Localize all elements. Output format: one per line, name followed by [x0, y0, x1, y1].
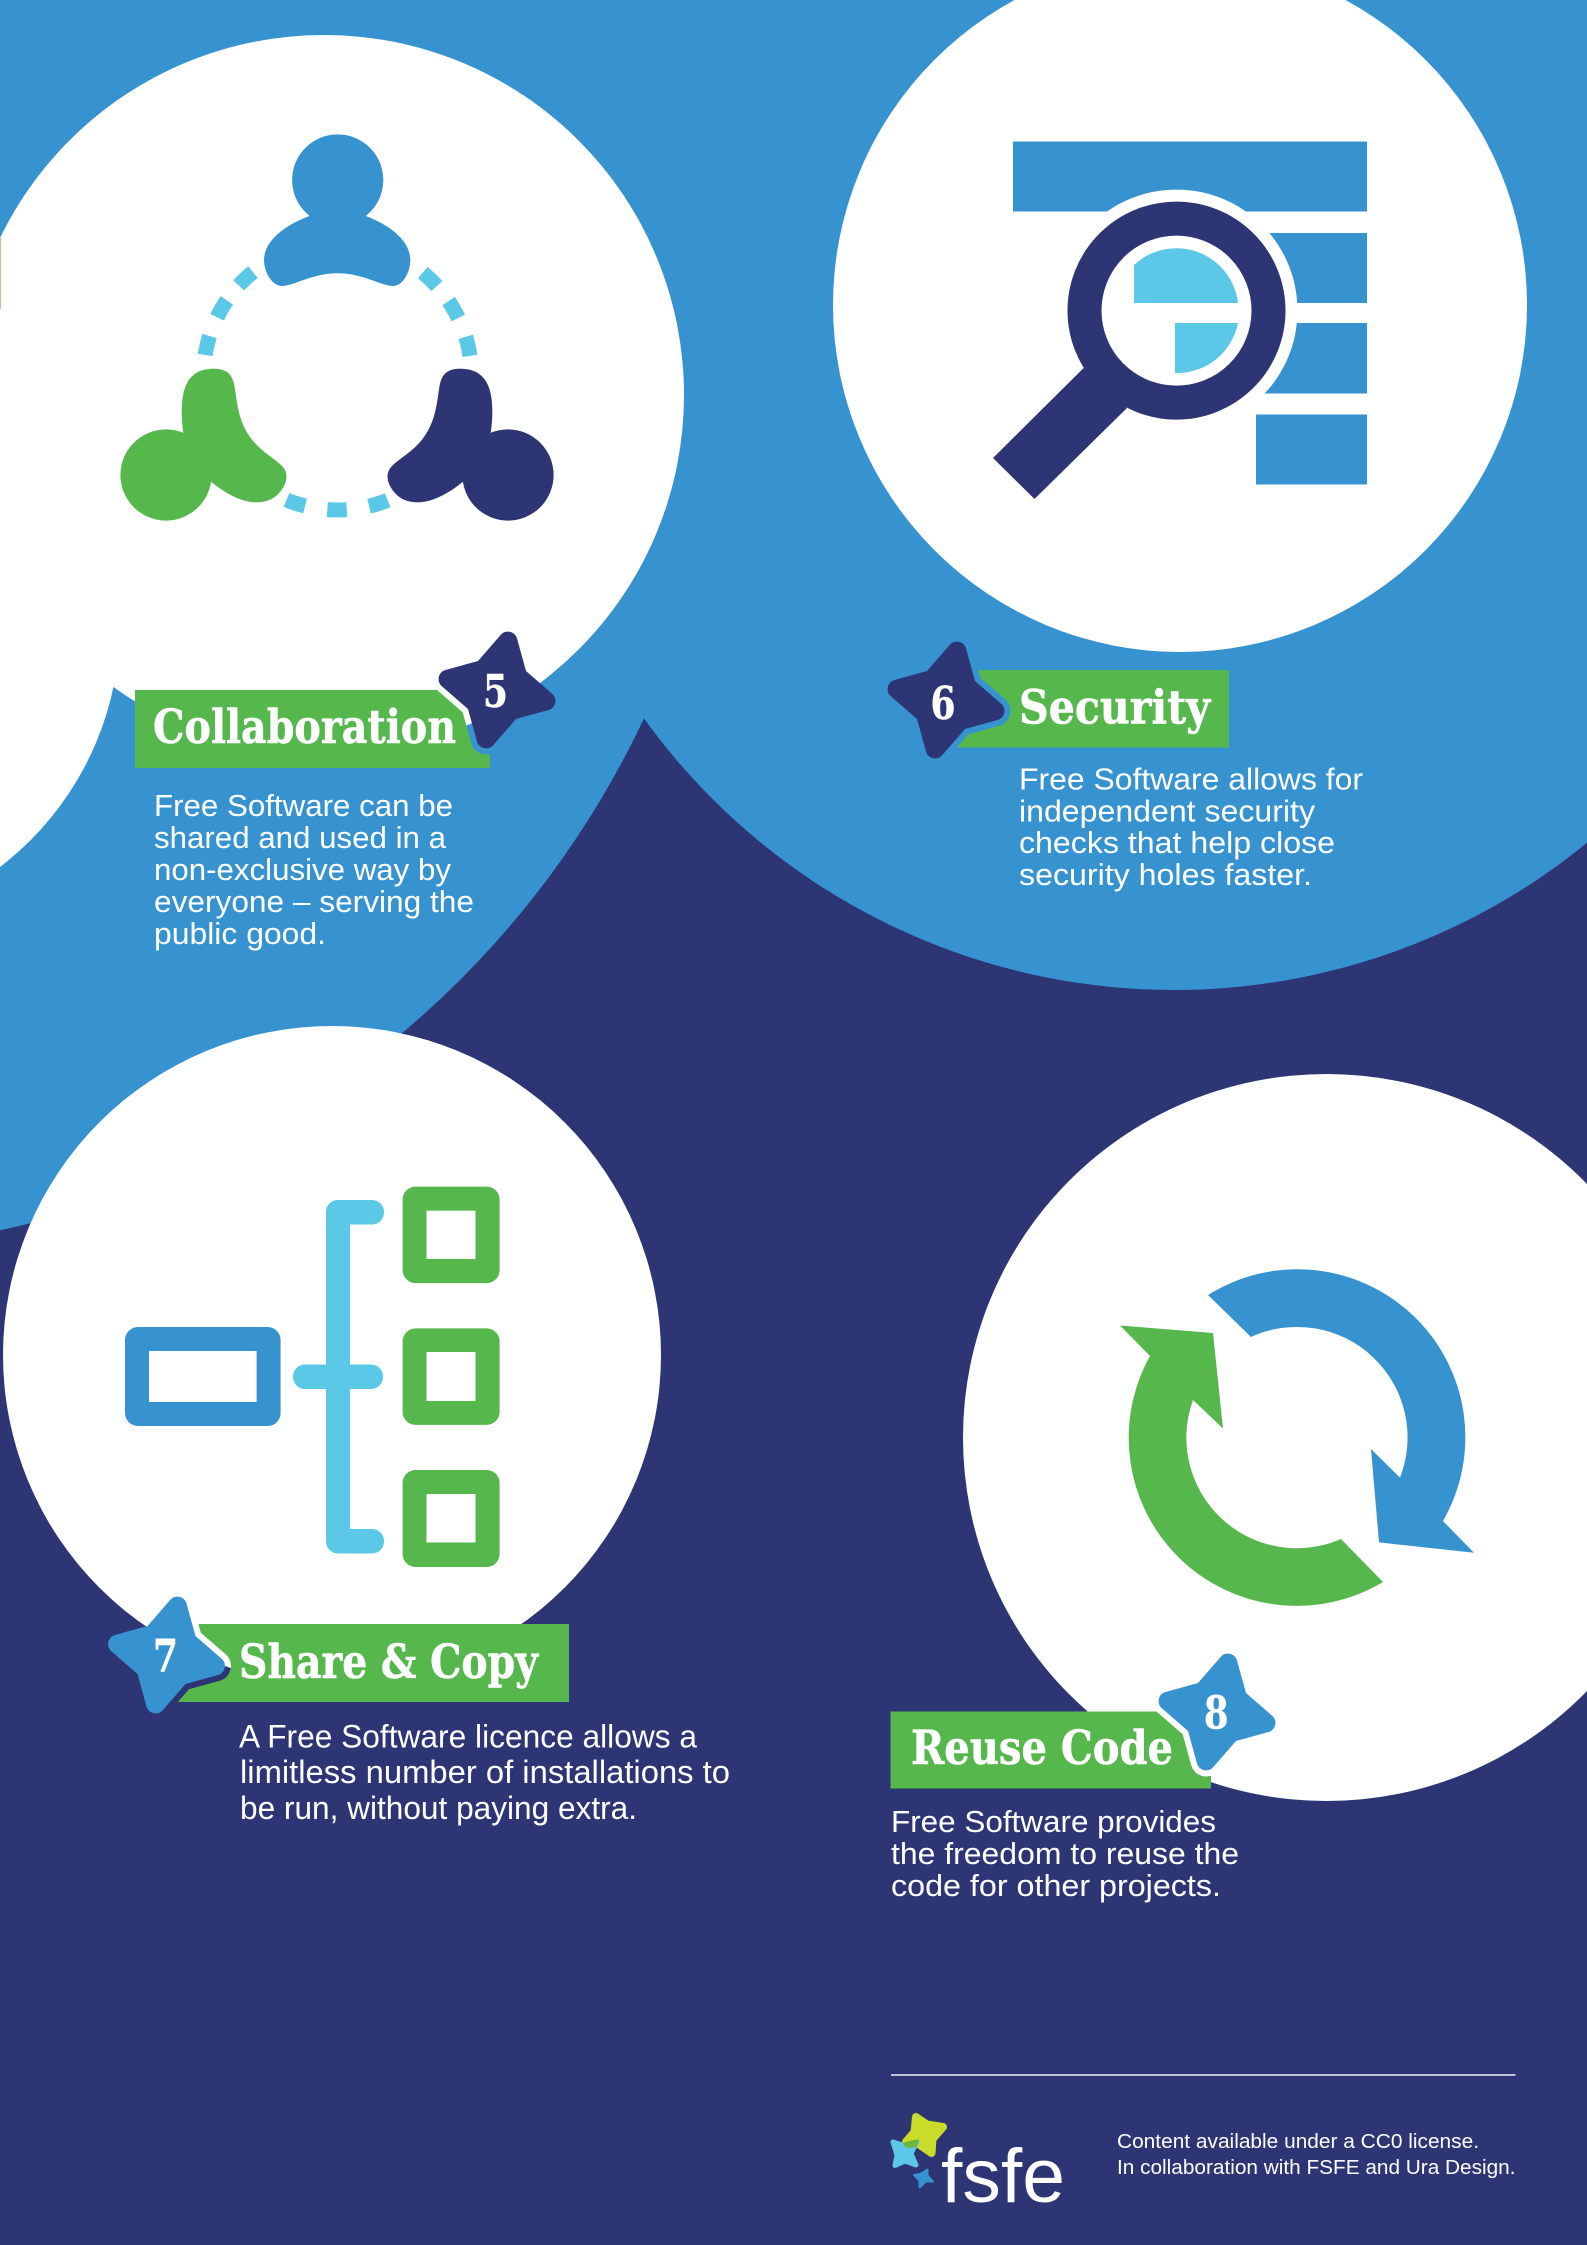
icon: table bars [1013, 142, 1367, 484]
text: collaboration description [154, 788, 474, 951]
icon: blue person [264, 134, 410, 286]
text: reuse code description: Free Software provides [891, 1804, 1216, 1839]
badge: number 7 [108, 1597, 225, 1713]
footer [891, 2074, 1516, 2219]
text: security description: security holes faster. [1019, 857, 1312, 892]
text: license note: In collaboration with FSFE and Ura Design. [1117, 2157, 1516, 2179]
logo: fsfe [893, 2117, 1065, 2219]
icon: three people in a circle [120, 134, 554, 565]
heading: collaboration: Collaboration [153, 700, 456, 755]
text: security description: checks that help close [1019, 825, 1335, 860]
circle: collaboration [0, 35, 684, 755]
heading: share and copy [176, 1624, 569, 1702]
badge: number 5: 5 [483, 665, 508, 718]
text: collaboration description: non-exclusive way by [154, 852, 451, 887]
badge: number 5 [439, 632, 555, 748]
icon: hierarchy [125, 1187, 500, 1567]
text: security description [1019, 762, 1363, 892]
icon: blue arrow [1208, 1269, 1474, 1553]
circle: share and copy [3, 1026, 661, 1684]
icon: green box middle [403, 1328, 500, 1425]
panel: security [833, 0, 1527, 892]
text: license note: Content available under a CC0 license. [1117, 2131, 1479, 2153]
badge: number 8: 8 [1204, 1686, 1228, 1740]
icon: green box bottom [403, 1470, 500, 1567]
text: security description: Free Software allows for [1019, 762, 1363, 796]
panel: collaboration [0, 35, 684, 951]
text: share and copy description [239, 1718, 730, 1826]
circle: reuse code [963, 1074, 1587, 1801]
text: license note [1117, 2131, 1516, 2179]
icon: magnifier over table [993, 142, 1367, 499]
heading: reuse code [890, 1712, 1211, 1788]
text: collaboration description: everyone – serving the [154, 884, 474, 919]
icon: green box top [403, 1187, 500, 1283]
icon: green person [120, 369, 286, 521]
text: collaboration description: public good. [154, 916, 326, 951]
panel: share and copy [3, 1026, 730, 1826]
text: collaboration description: shared and used in a [154, 820, 447, 855]
icon: magnifier [993, 219, 1268, 499]
icon: star overlap [903, 2139, 919, 2148]
text: collaboration description: Free Software can be [154, 788, 453, 823]
icon: small blue star [914, 2170, 933, 2188]
circle: security [833, 0, 1527, 652]
text: reuse code description: the freedom to reuse the [891, 1836, 1239, 1871]
text: reuse code description: code for other projects. [891, 1868, 1221, 1903]
text: security description: independent security [1019, 794, 1316, 828]
badge: number 7: 7 [153, 1630, 178, 1682]
icon: cyan star [893, 2142, 917, 2166]
heading: collaboration [135, 690, 490, 768]
icon: lime star [906, 2117, 943, 2153]
logo wordmark: fsfe [941, 2134, 1065, 2219]
heading: reuse code: Reuse Code [911, 1721, 1173, 1776]
panel: reuse code [890, 1074, 1587, 1903]
icon: reuse arrows [1120, 1269, 1474, 1606]
heading: security [955, 670, 1229, 748]
heading: security: Security [1019, 680, 1211, 736]
text: share and copy description: be run, without paying extra. [240, 1790, 637, 1826]
icon: green arrow [1120, 1326, 1383, 1606]
badge: number 8 [1159, 1654, 1275, 1770]
badge: number 6 [888, 642, 1004, 758]
text: reuse code description [891, 1804, 1239, 1903]
badge: number 6: 6 [930, 677, 956, 730]
icon: pie chart [1134, 248, 1238, 373]
icon: dashed ring [148, 187, 527, 565]
icon: source box [125, 1327, 281, 1426]
text: share and copy description: limitless number of installations to [240, 1754, 730, 1790]
icon: bracket connector [293, 1200, 384, 1554]
text: share and copy description: A Free Software licence allows a [239, 1718, 697, 1754]
icon: navy person [388, 369, 554, 521]
heading: share and copy: Share & Copy [239, 1635, 539, 1690]
